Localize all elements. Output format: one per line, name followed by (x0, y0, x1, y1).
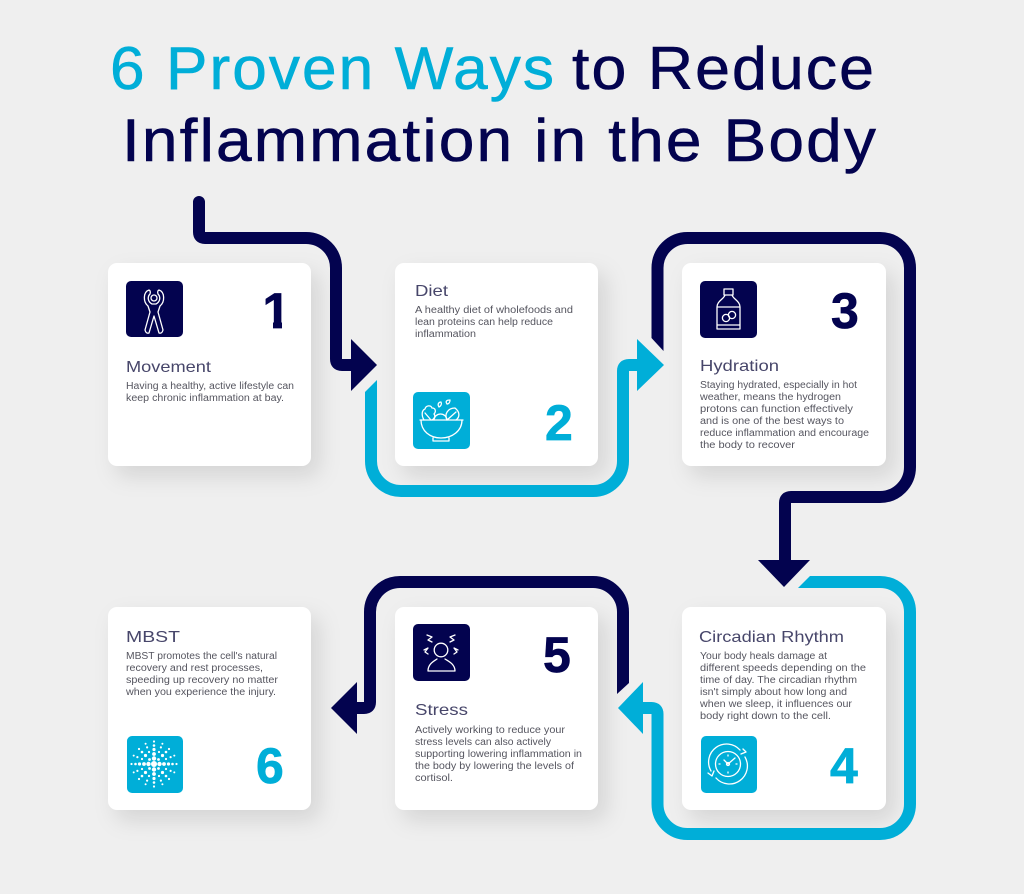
icon: clock (701, 736, 757, 793)
title: Inflammation in the Body (122, 107, 878, 174)
body text: circadian rhythm: Your body heals damage at (700, 651, 827, 662)
body text: mbst (125, 651, 279, 698)
arrow: step 3 to step 4 (652, 238, 910, 587)
title (110, 35, 878, 174)
body text: mbst: recovery and rest processes, (126, 663, 263, 674)
body text: circadian rhythm: time of day. The circadian rhythm (700, 675, 857, 686)
body text: hydration: protons can function effectively (700, 404, 853, 415)
number 3: 3 (831, 283, 859, 339)
body text: stress: stress levels can also actively (415, 737, 551, 748)
heading: mbst: MBST (126, 629, 180, 646)
body text: circadian rhythm: different speeds depending on the (700, 663, 867, 674)
body text: movement: keep chronic inflammation at bay. (126, 393, 284, 404)
icon: mbst dots (127, 736, 183, 793)
icon: movement (126, 281, 183, 337)
number 2: 2 (545, 395, 573, 451)
number 6: 6 (256, 738, 284, 794)
body text: movement: Having a healthy, active lifestyle can (126, 381, 294, 392)
body text: mbst: MBST promotes the cell's natural (126, 651, 277, 662)
panel: circadian rhythm (682, 607, 886, 810)
infographic canvas (108, 45, 916, 840)
number 1: 1 (262, 283, 290, 339)
body text: mbst: when you experience the injury. (125, 687, 276, 698)
body text: stress: Actively working to reduce your (415, 725, 566, 736)
icon: salad bowl (413, 392, 470, 449)
icon: stressed person (413, 624, 470, 681)
icon: bottle (700, 281, 757, 338)
body text: stress: cortisol. (415, 773, 453, 784)
body text: hydration: weather, means the hydrogen (699, 392, 841, 403)
body text: circadian rhythm: isn't simply about how long and (700, 687, 847, 698)
title: to Reduce (572, 35, 876, 102)
body text: diet: inflammation (415, 329, 476, 340)
body text: mbst: speeding up recovery no matter (126, 675, 279, 686)
panel: hydration (682, 263, 886, 466)
body text: hydration: Staying hydrated, especially in hot (700, 380, 857, 391)
number 5: 5 (543, 627, 571, 683)
arrow: step 2 to step 3 (365, 339, 664, 491)
body text: stress (415, 725, 582, 784)
body text: diet (415, 305, 573, 340)
arrow: start to step 2 (199, 202, 377, 391)
body text: stress: the body by lowering the levels of (415, 761, 574, 772)
title: 6 Proven Ways (110, 35, 556, 102)
number 4: 4 (830, 738, 858, 794)
panel: movement (108, 263, 311, 466)
body text: hydration (699, 380, 870, 451)
body text: circadian rhythm: body right down to the cell. (700, 711, 831, 722)
body text: diet: A healthy diet of wholefoods and (415, 305, 573, 316)
panel: stress (395, 607, 598, 810)
body text: diet: lean proteins can help reduce (415, 317, 554, 328)
body text: hydration: reduce inflammation and encourage (700, 428, 870, 439)
heading: circadian rhythm: Circadian Rhythm (699, 629, 844, 646)
body text: hydration: and is one of the best ways to (700, 416, 845, 427)
body text: movement (126, 381, 294, 404)
arrow: step 5 to step 6 (331, 582, 629, 734)
heading: hydration: Hydration (700, 358, 779, 375)
arrow: step 4 to step 5 (618, 576, 910, 834)
body text: stress: supporting lowering inflammation in (415, 749, 582, 760)
body text: circadian rhythm: when we sleep, it influences our (699, 699, 853, 710)
panel: diet (395, 263, 598, 466)
panel: mbst (108, 607, 311, 810)
heading: diet: Diet (415, 283, 449, 300)
body text: circadian rhythm (699, 651, 867, 722)
body text: hydration: the body to recover (700, 440, 796, 451)
heading: stress: Stress (415, 702, 468, 719)
heading: movement: Movement (126, 359, 212, 376)
